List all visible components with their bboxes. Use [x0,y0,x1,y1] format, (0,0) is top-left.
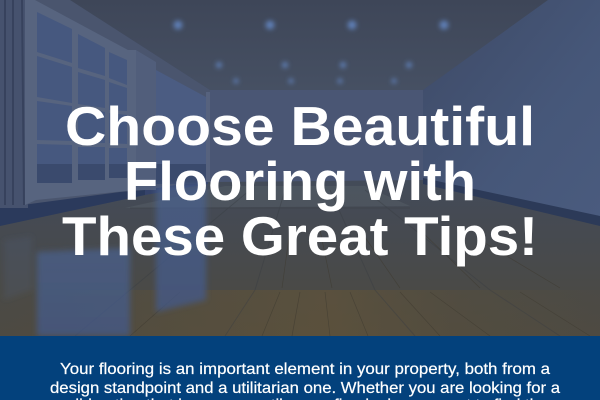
title: Flooring with [124,150,476,212]
title [62,95,538,267]
left window wall [0,0,210,225]
title: Choose Beautiful [65,95,535,157]
back wall [208,90,423,185]
second window [136,50,156,190]
floor [0,180,600,336]
baseboards [423,178,600,226]
window frame and curtain [0,0,210,208]
floor reflections [4,184,206,336]
floor tiles [0,186,600,336]
window panes [37,12,127,183]
intro text: design standpoint and a utilitarian one. Whether you are looking for a [50,380,560,397]
intro text: Your flooring is an important element in your property, both from a [60,361,550,378]
title: These Great Tips! [62,205,538,267]
intro text [50,361,560,400]
intro panel [0,336,600,400]
ceiling lights [174,20,448,84]
ceiling [70,0,548,90]
right wall [423,0,600,222]
